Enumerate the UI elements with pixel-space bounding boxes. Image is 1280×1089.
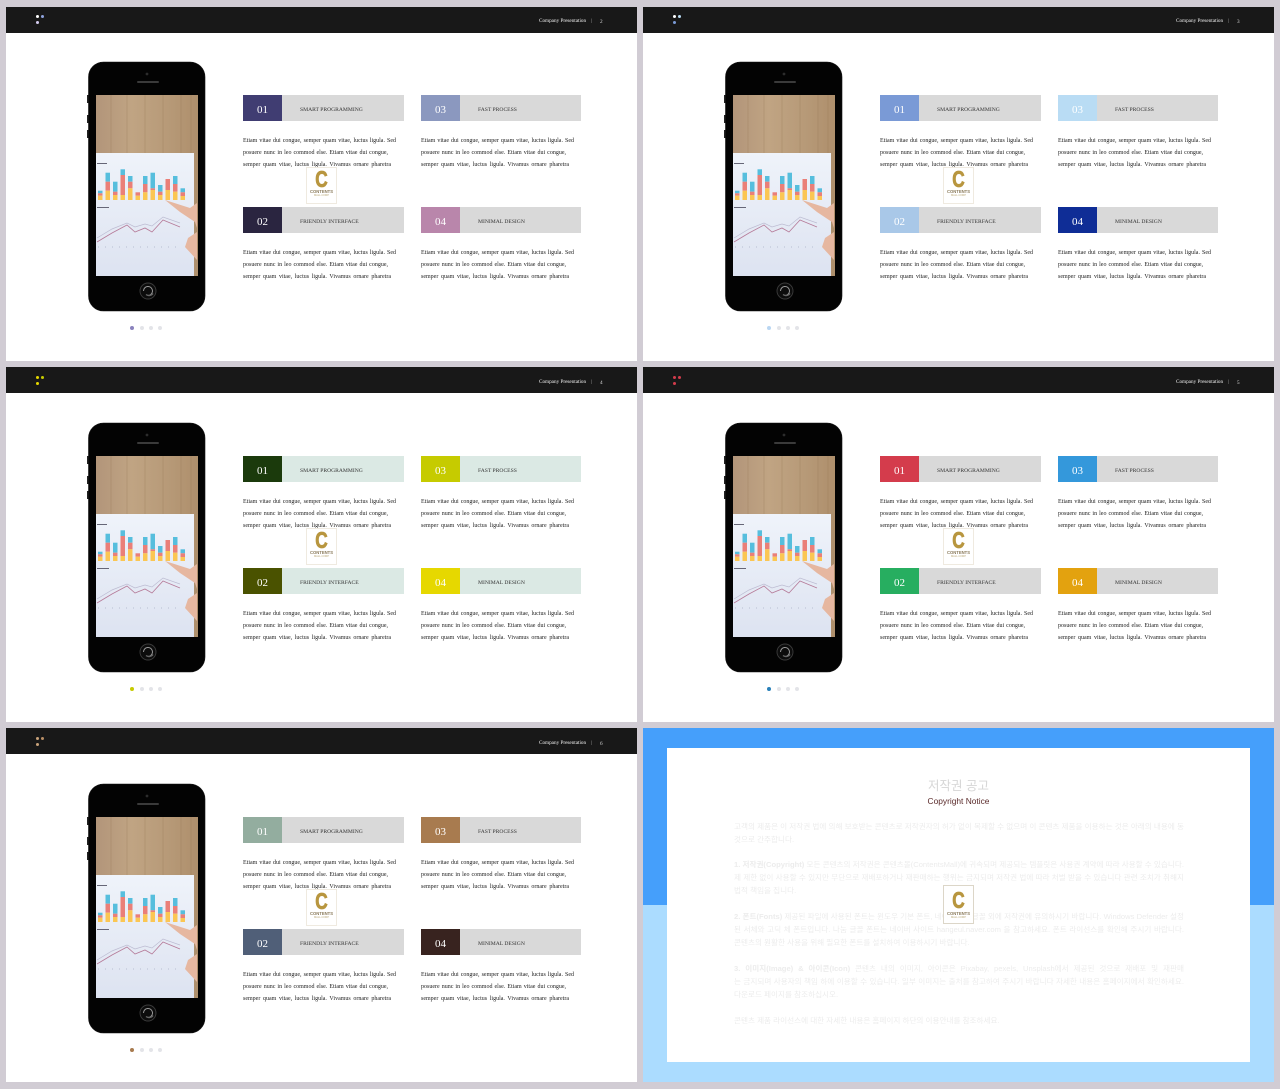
item 01 [243, 95, 404, 168]
watermark logo: CONTENTS [310, 189, 333, 194]
header bar [643, 367, 1274, 393]
item 02: Etiam vitae dui congue, semper quam vitae, luctus ligula. Sed [243, 972, 396, 978]
item 04: semper quam vitae, luctus ligula. Vivamus ornare pharetra [421, 996, 569, 1002]
item 03: FAST PROCESS [478, 107, 517, 113]
white notice sheet [667, 748, 1250, 1062]
item 03: posuere nunc in leo commod else. Etiam vitae dui congue, [1058, 511, 1203, 517]
item 04: Etiam vitae dui congue, semper quam vitae, luctus ligula. Sed [421, 250, 574, 256]
white notice sheet: 콘텐츠 제품 라이선스에 대한 자세한 내용은 홈페이지 하단의 이용안내를 참조하세요. [734, 1016, 1000, 1025]
item 04: 04 [435, 577, 446, 589]
item 01 [880, 456, 1041, 529]
phone mockup with chart photo [724, 422, 842, 672]
item 04: MINIMAL DESIGN [478, 219, 525, 225]
header bar [643, 7, 1274, 33]
item 03: Etiam vitae dui congue, semper quam vitae, luctus ligula. Sed [421, 138, 574, 144]
panel: copyright notice [643, 728, 1274, 1082]
item 04: semper quam vitae, luctus ligula. Vivamus ornare pharetra [421, 635, 569, 641]
item 02: posuere nunc in leo commod else. Etiam vitae dui congue, [243, 262, 388, 268]
item 03: FAST PROCESS [478, 829, 517, 835]
watermark logo: CONTENTS [310, 550, 333, 555]
item 03 [421, 95, 581, 168]
item 04: 04 [435, 938, 446, 950]
item 02: 02 [257, 577, 268, 589]
item 01: 01 [894, 104, 905, 116]
item 02: Etiam vitae dui congue, semper quam vitae, luctus ligula. Sed [880, 250, 1033, 256]
item 01: posuere nunc in leo commod else. Etiam vitae dui congue, [880, 511, 1025, 517]
item 03: Etiam vitae dui congue, semper quam vitae, luctus ligula. Sed [1058, 499, 1211, 505]
header bar: 4 [600, 380, 603, 386]
item 02: 02 [257, 216, 268, 228]
slide content [87, 422, 581, 691]
header bar: 6 [600, 741, 603, 747]
item 04: posuere nunc in leo commod else. Etiam vitae dui congue, [421, 623, 566, 629]
item 01: Etiam vitae dui congue, semper quam vitae, luctus ligula. Sed [243, 138, 396, 144]
item 01: posuere nunc in leo commod else. Etiam vitae dui congue, [243, 150, 388, 156]
white notice sheet: 3. 이미지(Image) & 아이콘(Icon) 콘텐츠 내의 이미지, 아이콘은 Pixabay, pexels, Unsplash에서 제공된 것으로 재배포 및 재판매 [734, 964, 1184, 973]
item 02: semper quam vitae, luctus ligula. Vivamus ornare pharetra [243, 635, 391, 641]
notice title English: Copyright Notice [928, 796, 989, 806]
pagination dots [130, 1048, 162, 1052]
item 04: Etiam vitae dui congue, semper quam vitae, luctus ligula. Sed [1058, 611, 1211, 617]
item 03: posuere nunc in leo commod else. Etiam vitae dui congue, [421, 150, 566, 156]
watermark logo [943, 528, 974, 565]
slide content [87, 784, 581, 1052]
header bar: 3 [1237, 19, 1240, 25]
pagination dots [130, 687, 162, 691]
white notice sheet: 법적 책임을 집니다. [734, 886, 796, 895]
item 03: Etiam vitae dui congue, semper quam vitae, luctus ligula. Sed [421, 499, 574, 505]
phone mockup with chart photo [724, 62, 842, 312]
item 01: semper quam vitae, luctus ligula. Vivamus ornare pharetra [243, 162, 391, 168]
panel: slide 4, green theme [6, 367, 637, 722]
item 03 [421, 456, 581, 529]
phone mockup with chart photo [87, 62, 206, 312]
header bar: 2 [600, 19, 603, 25]
item 02: posuere nunc in leo commod else. Etiam vitae dui congue, [880, 623, 1025, 629]
item 02: 02 [894, 216, 905, 228]
item 03: 03 [435, 104, 446, 116]
item 01: SMART PROGRAMMING [937, 107, 1000, 113]
header bar: 5 [1237, 380, 1240, 386]
item 04: MINIMAL DESIGN [478, 580, 525, 586]
watermark logo: CONTENTS [310, 911, 333, 916]
header bar [6, 367, 637, 393]
item 03: Etiam vitae dui congue, semper quam vitae, luctus ligula. Sed [1058, 138, 1211, 144]
white notice sheet: 는 금지되며 사용자의 책임 하에 이용할 수 있습니다. 일부 이미지는 출처를 참고하여 주시기 바랍니다 자세한 내용은 홈페이지에서 확인하세요. [734, 977, 1184, 986]
watermark logo: MALL.CORP [314, 916, 329, 919]
item 03: posuere nunc in leo commod else. Etiam vitae dui congue, [421, 511, 566, 517]
item 01: 01 [257, 104, 268, 116]
item 01: SMART PROGRAMMING [300, 829, 363, 835]
item 04: 04 [435, 216, 446, 228]
watermark logo [306, 528, 337, 565]
item 01: Etiam vitae dui congue, semper quam vitae, luctus ligula. Sed [243, 860, 396, 866]
item 01 [880, 95, 1041, 168]
panel: slide 2, violet theme [6, 7, 637, 361]
item 01 [243, 817, 404, 890]
header bar: Company Presentation [539, 740, 586, 746]
item 03: posuere nunc in leo commod else. Etiam vitae dui congue, [421, 872, 566, 878]
item 03: semper quam vitae, luctus ligula. Vivamus ornare pharetra [1058, 162, 1206, 168]
item 02: posuere nunc in leo commod else. Etiam vitae dui congue, [243, 984, 388, 990]
item 02 [880, 207, 1041, 280]
pagination dots [130, 326, 162, 330]
item 02: posuere nunc in leo commod else. Etiam vitae dui congue, [243, 623, 388, 629]
item 02: posuere nunc in leo commod else. Etiam vitae dui congue, [880, 262, 1025, 268]
phone mockup with chart photo [87, 422, 206, 672]
watermark logo [306, 889, 337, 926]
item 03: 03 [1072, 465, 1083, 477]
item 04: 04 [1072, 577, 1083, 589]
item 04: MINIMAL DESIGN [478, 941, 525, 947]
item 04 [421, 568, 581, 641]
header bar: Company Presentation [539, 18, 586, 24]
item 01: 01 [894, 465, 905, 477]
watermark logo: C [952, 887, 965, 913]
item 03: Etiam vitae dui congue, semper quam vitae, luctus ligula. Sed [421, 860, 574, 866]
item 01: SMART PROGRAMMING [300, 107, 363, 113]
item 02 [243, 929, 404, 1002]
item 03 [1058, 456, 1218, 529]
header bar: | [1228, 379, 1229, 385]
blue upper background [643, 728, 1274, 905]
item 02 [243, 568, 404, 641]
item 03: semper quam vitae, luctus ligula. Vivamus ornare pharetra [421, 884, 569, 890]
item 02: semper quam vitae, luctus ligula. Vivamus ornare pharetra [243, 274, 391, 280]
item 04 [1058, 207, 1218, 280]
header bar: | [1228, 18, 1229, 24]
header bar [6, 728, 637, 754]
item 01: Etiam vitae dui congue, semper quam vitae, luctus ligula. Sed [243, 499, 396, 505]
item 04: semper quam vitae, luctus ligula. Vivamus ornare pharetra [1058, 274, 1206, 280]
watermark logo [306, 167, 337, 204]
item 02: Etiam vitae dui congue, semper quam vitae, luctus ligula. Sed [243, 250, 396, 256]
white notice sheet: 다운로드 페이지를 참조하십시오. [734, 990, 838, 999]
item 04: Etiam vitae dui congue, semper quam vitae, luctus ligula. Sed [1058, 250, 1211, 256]
white notice sheet: 것으로 간주합니다. [734, 835, 794, 844]
item 03: 03 [1072, 104, 1083, 116]
header bar: | [591, 379, 592, 385]
watermark logo [943, 885, 974, 924]
item 01: posuere nunc in leo commod else. Etiam vitae dui congue, [243, 511, 388, 517]
item 03 [421, 817, 581, 890]
item 03: FAST PROCESS [1115, 107, 1154, 113]
item 02: semper quam vitae, luctus ligula. Vivamus ornare pharetra [880, 635, 1028, 641]
item 02: FRIENDLY INTERFACE [937, 219, 996, 225]
item 01: posuere nunc in leo commod else. Etiam vitae dui congue, [880, 150, 1025, 156]
item 01: SMART PROGRAMMING [937, 468, 1000, 474]
item 03: semper quam vitae, luctus ligula. Vivamus ornare pharetra [421, 523, 569, 529]
panel: slide 5, multicolour theme [643, 367, 1274, 722]
panel: slide 3, blue theme [643, 7, 1274, 361]
item 02 [243, 207, 404, 280]
item 02: semper quam vitae, luctus ligula. Vivamus ornare pharetra [243, 996, 391, 1002]
item 02: 02 [894, 577, 905, 589]
item 01: 01 [257, 465, 268, 477]
item 01: Etiam vitae dui congue, semper quam vitae, luctus ligula. Sed [880, 138, 1033, 144]
item 01: semper quam vitae, luctus ligula. Vivamus ornare pharetra [880, 523, 1028, 529]
item 04 [1058, 568, 1218, 641]
watermark logo: CONTENTS [947, 550, 970, 555]
item 02: 02 [257, 938, 268, 950]
item 04 [421, 207, 581, 280]
item 01 [243, 456, 404, 529]
header bar: | [591, 18, 592, 24]
watermark logo: MALL.CORP [951, 194, 966, 197]
item 01: semper quam vitae, luctus ligula. Vivamus ornare pharetra [243, 884, 391, 890]
panel: slide 6, earth theme [6, 728, 637, 1082]
item 03: FAST PROCESS [478, 468, 517, 474]
watermark logo: CONTENTS [947, 911, 970, 916]
item 04: semper quam vitae, luctus ligula. Vivamus ornare pharetra [421, 274, 569, 280]
item 02: Etiam vitae dui congue, semper quam vitae, luctus ligula. Sed [243, 611, 396, 617]
watermark logo [943, 167, 974, 204]
item 01: posuere nunc in leo commod else. Etiam vitae dui congue, [243, 872, 388, 878]
slide content [724, 422, 1218, 691]
watermark logo: MALL.CORP [314, 555, 329, 558]
item 03: semper quam vitae, luctus ligula. Vivamus ornare pharetra [421, 162, 569, 168]
item 02: FRIENDLY INTERFACE [937, 580, 996, 586]
item 04: Etiam vitae dui congue, semper quam vitae, luctus ligula. Sed [421, 611, 574, 617]
notice title Korean: 저작권 공고 [928, 779, 989, 793]
item 02: FRIENDLY INTERFACE [300, 219, 359, 225]
white notice sheet: 콘텐츠의 원활한 사용을 위해 필요한 폰트를 설치하여 이용하시기 바랍니다. [734, 938, 970, 947]
item 04: posuere nunc in leo commod else. Etiam vitae dui congue, [421, 262, 566, 268]
watermark logo: MALL.CORP [951, 555, 966, 558]
item 03: 03 [435, 826, 446, 838]
white notice sheet: 2. 폰트(Fonts) 제공된 파일에 사용된 폰트는 윈도우 기본 폰트, 네이버 나눔글꼴 외에 저작권에 유의하시기 바랍니다. Windows Defender 설정 [734, 912, 1184, 921]
item 01: Etiam vitae dui congue, semper quam vitae, luctus ligula. Sed [880, 499, 1033, 505]
item 01: semper quam vitae, luctus ligula. Vivamus ornare pharetra [243, 523, 391, 529]
header bar: | [591, 740, 592, 746]
header bar: Company Presentation [1176, 18, 1223, 24]
item 03 [1058, 95, 1218, 168]
white notice sheet: 된 서체와 고딕 체 폰트입니다. 나눔 글꼴 폰트는 네이버 사이트 hangeul.naver.com 을 참고하세요. 폰트 라이선스를 확인해 주시기 바랍니다. [734, 925, 1184, 934]
item 04: posuere nunc in leo commod else. Etiam vitae dui congue, [421, 984, 566, 990]
item 01: SMART PROGRAMMING [300, 468, 363, 474]
item 03: 03 [435, 465, 446, 477]
item 03: posuere nunc in leo commod else. Etiam vitae dui congue, [1058, 150, 1203, 156]
item 02: FRIENDLY INTERFACE [300, 580, 359, 586]
item 04: semper quam vitae, luctus ligula. Vivamus ornare pharetra [1058, 635, 1206, 641]
header bar: Company Presentation [539, 379, 586, 385]
item 02: semper quam vitae, luctus ligula. Vivamus ornare pharetra [880, 274, 1028, 280]
item 04: MINIMAL DESIGN [1115, 219, 1162, 225]
watermark logo: MALL.CORP [951, 916, 966, 919]
item 04: posuere nunc in leo commod else. Etiam vitae dui congue, [1058, 262, 1203, 268]
pagination dots [767, 326, 799, 330]
item 02: FRIENDLY INTERFACE [300, 941, 359, 947]
slide content [724, 62, 1218, 330]
item 03: FAST PROCESS [1115, 468, 1154, 474]
pagination dots [767, 687, 799, 691]
item 04: posuere nunc in leo commod else. Etiam vitae dui congue, [1058, 623, 1203, 629]
item 04: MINIMAL DESIGN [1115, 580, 1162, 586]
item 01: 01 [257, 826, 268, 838]
watermark logo: MALL.CORP [314, 194, 329, 197]
watermark logo: CONTENTS [947, 189, 970, 194]
item 04: Etiam vitae dui congue, semper quam vitae, luctus ligula. Sed [421, 972, 574, 978]
header bar: Company Presentation [1176, 379, 1223, 385]
item 02: Etiam vitae dui congue, semper quam vitae, luctus ligula. Sed [880, 611, 1033, 617]
slide content [87, 62, 581, 330]
item 03: semper quam vitae, luctus ligula. Vivamus ornare pharetra [1058, 523, 1206, 529]
phone mockup with chart photo [87, 784, 206, 1034]
item 02 [880, 568, 1041, 641]
item 04: 04 [1072, 216, 1083, 228]
notice body text [734, 822, 1184, 1025]
item 04 [421, 929, 581, 1002]
item 01: semper quam vitae, luctus ligula. Vivamus ornare pharetra [880, 162, 1028, 168]
header bar [6, 7, 637, 33]
